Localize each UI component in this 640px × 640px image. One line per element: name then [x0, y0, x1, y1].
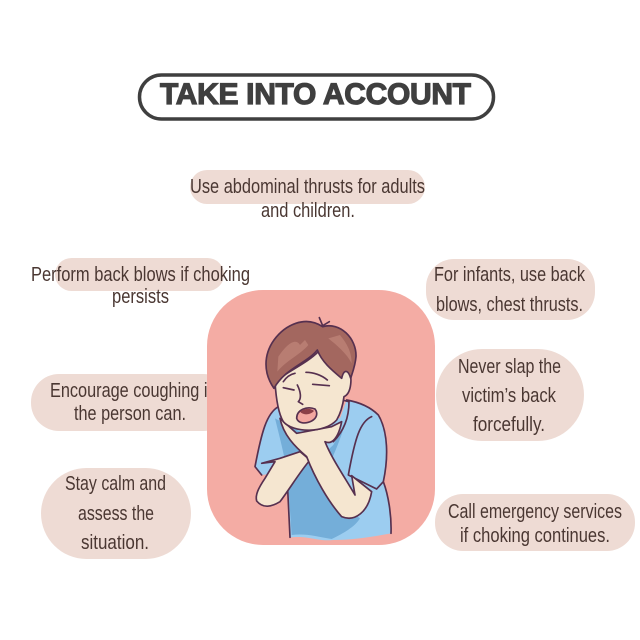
illustration panel: [207, 290, 435, 545]
icon: choking person: [255, 318, 391, 540]
tip: back blows: Perform back blows if choking: [31, 264, 250, 286]
tip: never slap: [436, 349, 584, 441]
face: [275, 352, 351, 430]
tip: stay calm: [41, 468, 191, 559]
tip: encourage coughing: Encourage coughing if: [50, 380, 212, 402]
title: TAKE INTO ACCOUNT: [160, 78, 471, 111]
shirt shadow: [275, 418, 360, 539]
tip: stay calm: assess the: [78, 503, 154, 525]
eyes and eyebrows: [283, 372, 329, 404]
far arm: [256, 452, 310, 506]
tip: encourage coughing: the person can.: [74, 403, 186, 425]
tip: abdominal thrusts: Use abdominal thrusts for adults: [190, 176, 425, 198]
tip: back blows: persists: [112, 286, 169, 308]
tip: stay calm: Stay calm and: [65, 473, 166, 495]
tip: abdominal thrusts: [190, 170, 425, 222]
tip: emergency services: [435, 494, 635, 551]
tip: never slap: Never slap the: [458, 356, 561, 378]
mouth: [297, 408, 317, 423]
tip: abdominal thrusts: and children.: [261, 200, 355, 222]
shirt outline: [255, 400, 391, 537]
tip: back blows: [31, 258, 250, 308]
tip: never slap: forcefully.: [473, 414, 545, 436]
hair highlight: [277, 335, 352, 372]
tip: emergency services: if choking continues.: [460, 525, 610, 547]
tip: never slap: victim’s back: [462, 385, 557, 407]
tip: stay calm: situation.: [81, 532, 149, 554]
hair: [266, 322, 356, 388]
title: [140, 75, 494, 119]
shirt body: [255, 400, 391, 540]
tip: infants: [426, 259, 595, 320]
near arm: [280, 418, 372, 518]
tip: encourage coughing: [31, 374, 231, 431]
tip: infants: For infants, use back: [434, 264, 586, 286]
tip: infants: blows, chest thrusts.: [436, 294, 583, 316]
